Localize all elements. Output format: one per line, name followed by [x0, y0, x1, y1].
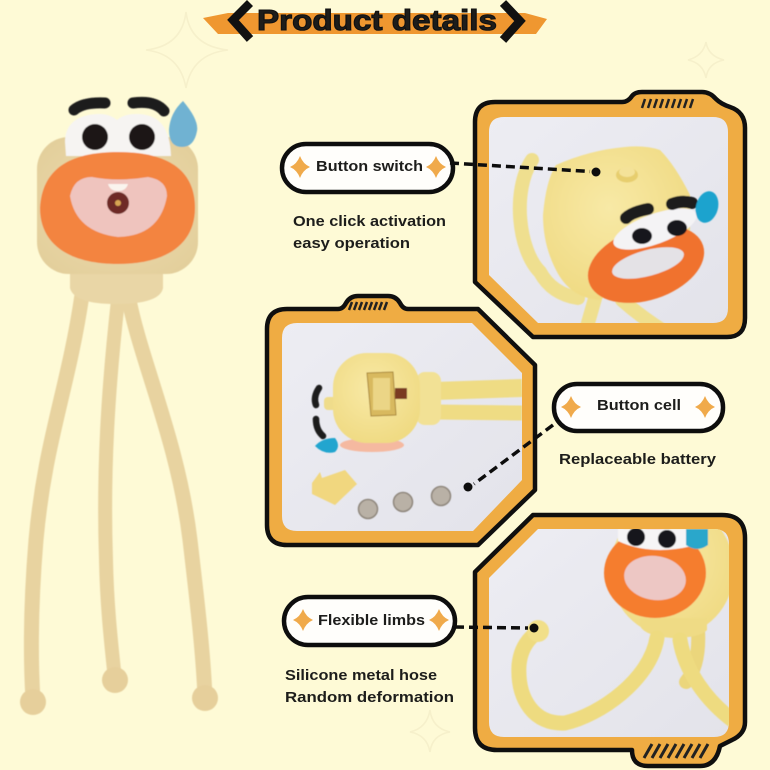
product pupils — [82, 124, 155, 150]
panel 3 photo — [489, 529, 729, 737]
leader line: button switch — [450, 163, 600, 176]
panel 1 drop — [694, 190, 720, 224]
panel: flexible limbs photo — [475, 504, 745, 766]
icon: right diamond — [426, 156, 446, 178]
description: flexible limbs, line 1: Silicone metal hose — [285, 667, 437, 684]
panel 3 hatch marks — [644, 744, 708, 758]
panel 3 inner mouth — [623, 554, 687, 602]
panel 1 mouth — [587, 229, 705, 304]
icon: left diamond — [561, 396, 581, 418]
icon: right diamond — [695, 396, 715, 418]
panel 1 head — [543, 146, 690, 300]
panel 3 head — [614, 529, 729, 627]
pill: flexible limbs — [284, 597, 455, 645]
panel 1 brows — [626, 202, 692, 218]
panel 1 hatch marks — [642, 99, 693, 108]
panel 2 nub — [324, 397, 338, 410]
product eyebrows — [74, 102, 164, 111]
icon: left diamond — [293, 609, 313, 631]
panel 3 limbs — [519, 634, 735, 723]
panel 1 limbs — [520, 160, 662, 330]
label: button cell: Button cell — [597, 397, 681, 414]
panel 3 limb tip — [527, 620, 549, 642]
panel 3 rear limb — [686, 630, 698, 682]
leader line: flexible limbs — [455, 624, 538, 632]
panel 3 eyes — [618, 529, 692, 550]
product head — [37, 137, 198, 274]
panel 2 battery cover — [312, 470, 357, 505]
panel 2 neck — [416, 372, 441, 425]
panel 2 drop — [315, 438, 338, 453]
right chevron — [503, 3, 520, 40]
callout: button switch — [282, 144, 453, 192]
product limbs — [31, 295, 205, 700]
panel 2 coin cells — [358, 486, 450, 518]
title banner — [203, 3, 547, 40]
title text: Product details — [257, 5, 497, 37]
pill: button switch — [282, 144, 453, 192]
pill: button cell — [554, 384, 723, 431]
leader line: button cell — [464, 425, 553, 492]
description: button cell: Replaceable battery — [559, 451, 717, 468]
panel: battery photo — [267, 296, 535, 545]
panel 3 frame — [475, 515, 745, 766]
panel 2 limbs — [435, 388, 522, 413]
callout: button cell — [554, 384, 723, 431]
panel 2 brows — [315, 388, 323, 436]
callout: flexible limbs — [284, 597, 455, 645]
panel 2 battery compartment — [367, 372, 407, 416]
panel 2 head — [333, 353, 420, 443]
product tooth — [108, 184, 128, 191]
panel 2 photo — [282, 323, 522, 531]
label: flexible limbs: Flexible limbs — [318, 612, 425, 629]
decorative sparkles — [146, 12, 724, 752]
icon: right diamond — [429, 609, 449, 631]
panel 1 eyes — [612, 208, 698, 250]
product inner mouth — [70, 177, 167, 237]
product neck — [70, 270, 163, 304]
product mouth — [40, 152, 195, 264]
product lens — [107, 192, 129, 214]
panel 3 mouth — [604, 528, 706, 618]
product eye whites — [65, 114, 171, 156]
icon: left diamond — [290, 156, 310, 178]
panel 1 button — [616, 167, 638, 182]
main product figure — [20, 101, 218, 715]
panel 1 frame — [475, 92, 745, 337]
description: button switch, line 1: One click activation — [293, 213, 446, 230]
left chevron — [233, 3, 250, 39]
product limb tips — [20, 667, 218, 715]
panel 2 mouth shadow — [340, 438, 404, 452]
panel 3 neck — [640, 624, 708, 639]
panel 2 hatch marks — [349, 302, 387, 310]
panel 1 photo — [489, 117, 729, 330]
panel: button switch photo — [475, 92, 745, 337]
title brush stroke — [203, 13, 547, 34]
panel 2 frame — [267, 296, 535, 545]
description: flexible limbs, line 2: Random deformation — [285, 689, 454, 706]
label: button switch: Button switch — [316, 158, 423, 175]
panel 3 drop — [686, 529, 708, 549]
description: button switch, line 2: easy operation — [293, 235, 410, 252]
product water drop — [169, 101, 197, 147]
